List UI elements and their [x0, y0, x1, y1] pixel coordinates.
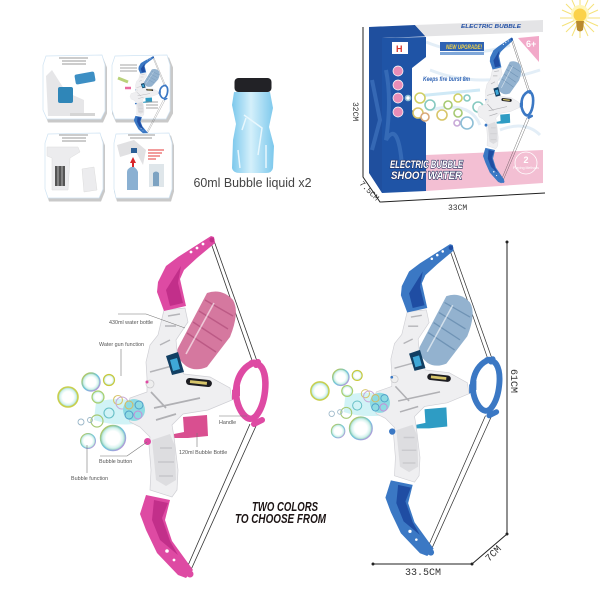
pink bow annotations: Bubble button [99, 459, 132, 465]
box title: ELECTRIC BUBBLE [390, 159, 463, 171]
two colors caption [235, 499, 327, 526]
panel: step 4 fill water bottle [114, 133, 174, 202]
range label: Keeps fire burst 8m [423, 77, 471, 83]
pink bow annotations: 430ml water bottle [109, 320, 153, 326]
box dimensions: 33CM [448, 204, 467, 213]
box top strip title: ELECTRIC BUBBLE [461, 24, 521, 30]
box logo [392, 42, 408, 54]
playing methods badge: 2 [523, 155, 529, 165]
pink bow annotations: Water gun function [99, 342, 144, 348]
box dimensions: 32CM [350, 102, 359, 121]
blue bow dimensions [372, 240, 518, 579]
box side and flap [369, 25, 426, 193]
pink bow annotations: Bubble function [71, 476, 108, 482]
box bubbles [406, 90, 483, 129]
playing methods badge [513, 152, 539, 174]
box front [382, 32, 543, 193]
bubble liquid bottle [232, 78, 274, 173]
upgrade badge [440, 42, 484, 55]
age badge: 6+ [526, 39, 536, 49]
pink bow annotations: Handle [219, 420, 236, 426]
two colors caption: TO CHOOSE FROM [235, 511, 327, 526]
age badge [518, 36, 539, 62]
box top strip [415, 20, 543, 37]
blue bow dimensions: 7CM [484, 544, 505, 565]
two colors caption: TWO COLORS [252, 499, 318, 514]
box blue panel [382, 37, 426, 193]
blue bow dimensions: 33.5CM [405, 568, 441, 579]
panel: step 1 bubble solution [43, 55, 107, 122]
pink bow annotations [71, 314, 247, 482]
box feature icons [393, 66, 403, 117]
bottle caption: 60ml Bubble liquid x2 [194, 175, 312, 190]
box dimensions [350, 27, 545, 213]
box title [390, 159, 463, 182]
panel: step 3 batteries [45, 133, 105, 202]
icon: light bulb [560, 0, 600, 38]
box title: SHOOT WATER [391, 170, 462, 182]
box pink panel [426, 150, 543, 191]
panel: step 2 fill water column [112, 55, 173, 135]
box bow [477, 38, 533, 183]
box dimensions: 7.5CM [357, 180, 380, 203]
pink bow annotations: 120ml Bubble Bottle [179, 450, 227, 456]
pink bow toy [58, 236, 265, 578]
blue bow toy [311, 244, 499, 556]
product box [369, 20, 543, 193]
playing methods badge: Playing Methods [513, 166, 539, 170]
blue bow dimensions: 61CM [507, 369, 518, 393]
instruction panels [43, 55, 174, 202]
upgrade badge: NEW UPGRADE! [446, 44, 483, 51]
box logo: H [396, 44, 402, 54]
